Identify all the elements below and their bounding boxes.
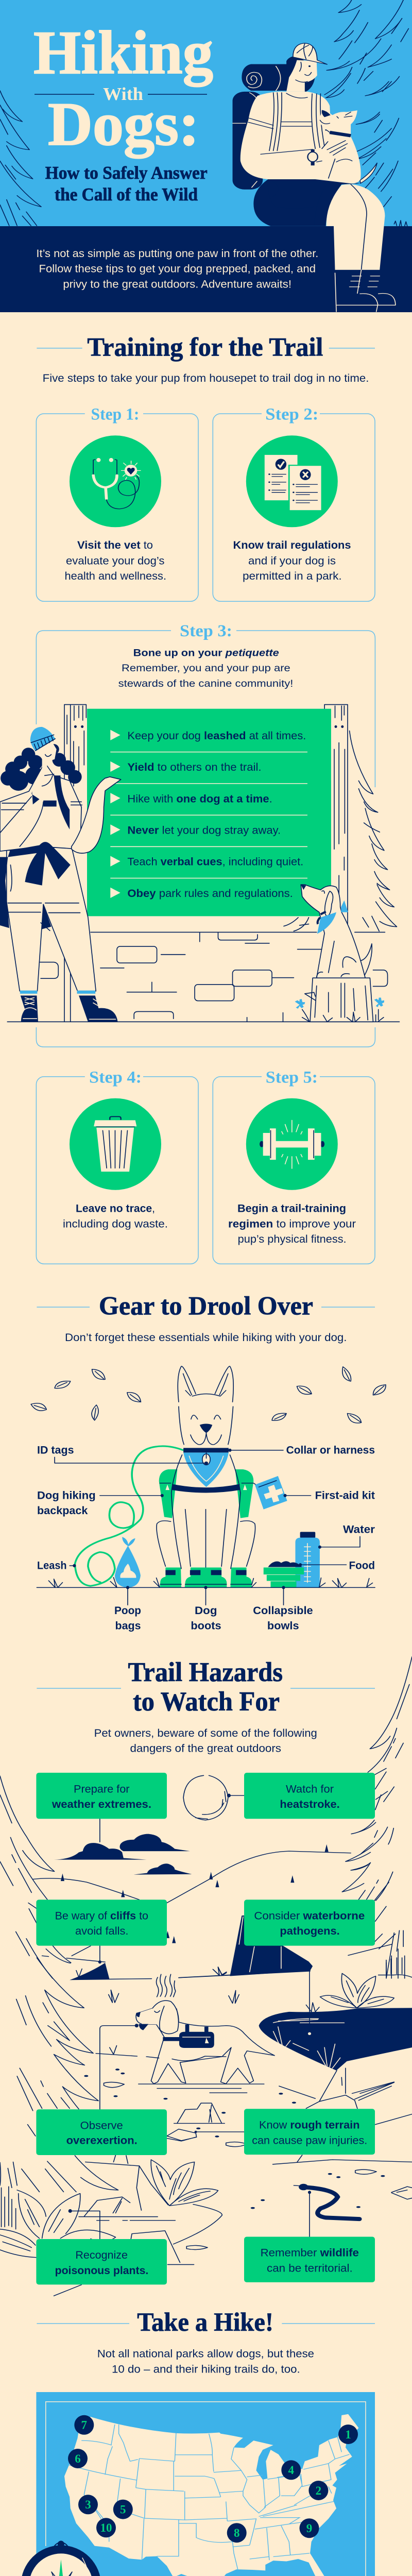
socks [20, 991, 37, 994]
callout: poisonous plants: poisonous plants. [55, 2265, 148, 2277]
illustration: sitting dog on stump [295, 885, 384, 1022]
cliff and rock base [70, 1963, 110, 1980]
shirt and arm details [43, 801, 57, 807]
map pins: 8 [234, 2527, 239, 2539]
sun [183, 1775, 228, 1820]
map pins: 3 [85, 2498, 91, 2511]
steam [157, 1974, 176, 1997]
intro: hazards: dangers of the great outdoors [130, 1743, 281, 1755]
wildlife connector [308, 2192, 311, 2236]
bandana [183, 1452, 229, 1487]
panel: step 3 [0, 622, 400, 1047]
hair [1, 744, 82, 791]
callout: overexertion: Observe [80, 2120, 123, 2132]
ground and grass [37, 1578, 375, 1587]
step 3 intro text: Bone up on your petiquette [133, 648, 279, 659]
stump [310, 978, 373, 1022]
step 1 text: evaluate your dog’s [66, 555, 165, 567]
callout: rough terrain [244, 2109, 375, 2155]
gear labels: backpack [37, 1505, 88, 1517]
callout: waterborne pathogens [244, 1900, 375, 1946]
map pins [68, 2415, 358, 2543]
green sign panel [87, 709, 331, 916]
leg details [351, 184, 367, 270]
step 2 text: Know trail regulations [233, 539, 351, 551]
backpack details [160, 1483, 257, 1485]
gear labels: bags [115, 1620, 141, 1632]
step 1 text [65, 539, 166, 582]
terrain connector [308, 1971, 311, 2033]
id tag [202, 1453, 210, 1465]
clothing lines [248, 44, 329, 224]
panel: step 5 [213, 1068, 375, 1264]
tied jacket [0, 842, 71, 928]
gear labels: Collapsible [253, 1605, 313, 1617]
map pins: 1 [345, 2428, 351, 2441]
callout: weather extremes: Prepare for [74, 1783, 130, 1795]
poop bag [115, 1537, 141, 1587]
gear labels: Dog [195, 1605, 217, 1617]
map panel [21, 2392, 375, 2576]
shorts [253, 178, 360, 226]
rock details [239, 1917, 281, 1972]
illustration: pine trees [0, 0, 408, 226]
boot [335, 270, 396, 312]
title: Hiking [33, 18, 213, 87]
callout: cliffs: Be wary of cliffs to [55, 1910, 148, 1922]
gear labels [37, 1445, 375, 1632]
overheated dog [136, 2001, 274, 2084]
intro text: Follow these tips to get your dog prepped, packed, and [39, 263, 316, 275]
map pins: 2 [316, 2484, 321, 2497]
hills [33, 1851, 351, 1903]
step 2 text: and if your dog is [248, 555, 336, 567]
icon: stethoscope [70, 435, 161, 527]
heading: Trail Hazards to Watch For: to Watch For [133, 1687, 280, 1717]
dog in arms [307, 110, 377, 183]
clouds [54, 1834, 192, 1875]
callout: weather extremes: weather extremes. [52, 1799, 151, 1810]
tail [360, 944, 372, 977]
dog connector and ground [96, 2026, 159, 2110]
gear labels: ID tags [37, 1445, 74, 1456]
right tree [342, 1657, 412, 1978]
intro text: privy to the great outdoors. Adventure awaits! [63, 278, 291, 290]
icon: trash can [70, 1098, 161, 1190]
gear labels: Food [349, 1560, 375, 1572]
title: Dogs: [48, 90, 199, 159]
legs [7, 846, 96, 991]
gear labels: Leash [37, 1560, 67, 1572]
lower scene [0, 1958, 412, 2296]
rolled bedroll [242, 64, 288, 91]
step 5 text [228, 1202, 356, 1245]
sign posts [64, 705, 348, 1022]
map pins: 9 [306, 2522, 312, 2535]
etiquette checklist: Never let your dog stray away. [127, 824, 281, 837]
upper scene [0, 1657, 412, 1978]
intro: gear: Don’t forget these essentials while hiking with your dog. [65, 1332, 347, 1344]
step 4 heading: Step 4: [89, 1068, 142, 1087]
bandana [317, 901, 348, 934]
hazard plant connector [70, 2197, 175, 2240]
step 4 text [63, 1202, 168, 1230]
water bottle [295, 1532, 320, 1587]
illustration: hazards trail scene [0, 1657, 412, 2296]
title [33, 18, 213, 159]
step 3 intro text: Remember, you and your pup are [122, 663, 290, 674]
step 2 text: permitted in a park. [243, 570, 342, 582]
gear labels: Poop [114, 1605, 141, 1617]
callout: wildlife: Remember wildlife [261, 2247, 359, 2259]
floating leaves [31, 1367, 386, 1423]
pine tree [284, 731, 397, 931]
callout: poisonous plants: Recognize [75, 2249, 128, 2261]
callout: poisonous plants [36, 2239, 167, 2284]
cap [293, 43, 327, 64]
torso [0, 762, 81, 851]
callout: waterborne pathogens: Consider waterborne [254, 1910, 365, 1922]
subtitle: the Call of the Wild [55, 184, 198, 205]
step 5 heading: Step 5: [266, 1068, 318, 1087]
rocks and ground details [54, 2068, 412, 2296]
icon: regulations documents [246, 435, 338, 527]
intro text: It’s not as simple as putting one paw in front of the other. [36, 248, 318, 260]
hair [286, 56, 316, 92]
sun connector [229, 1794, 244, 1797]
intro text [36, 248, 318, 290]
heading: Training for the Trail: Training for the Trail [87, 333, 323, 362]
collar [318, 912, 326, 924]
step 3 intro text: stewards of the canine community! [118, 678, 293, 689]
dog boots [160, 1568, 252, 1587]
step 5 text: pup’s physical fitness. [238, 1233, 347, 1245]
gear labels: Water [343, 1524, 375, 1536]
intro: five steps: Five steps to take your pup from housepet to trail dog in no time. [43, 372, 369, 384]
boot details [23, 997, 115, 1019]
map pins: 6 [75, 2452, 81, 2465]
step 4 text: including dog waste. [63, 1218, 168, 1230]
panel: hero header [0, 0, 412, 312]
snake [302, 2187, 359, 2219]
intro: hazards [94, 1727, 317, 1755]
step 1 text: Visit the vet to [77, 539, 153, 551]
grass [109, 1967, 239, 2054]
poisonous plants [0, 2160, 218, 2258]
face [42, 743, 57, 778]
etiquette checklist: Keep your dog leashed at all times. [127, 730, 306, 742]
callout lines [55, 1449, 360, 1605]
callout: wildlife: can be territorial. [267, 2262, 353, 2274]
stump details [305, 983, 368, 1020]
panel: step 4 [36, 1068, 198, 1264]
subtitle [45, 163, 208, 205]
step 2 text [233, 539, 351, 582]
hat details [31, 735, 55, 756]
sky background [0, 0, 412, 226]
map pins: 7 [81, 2418, 87, 2432]
subtitle: How to Safely Answer [45, 163, 208, 183]
boots [21, 995, 118, 1022]
step 5 text: Begin a trail-training [237, 1202, 346, 1214]
rock formation [230, 1914, 313, 1976]
dog details [317, 891, 356, 977]
etiquette checklist: Hike with one dog at a time . [127, 793, 272, 805]
callout: waterborne pathogens: pathogens. [280, 1925, 340, 1937]
backpack [233, 92, 263, 190]
weather connector [99, 1819, 100, 1842]
lake [259, 2008, 412, 2071]
intro: hazards: Pet owners, beware of some of the following [94, 1727, 317, 1739]
panel: step 2 [213, 405, 375, 601]
intro: national parks: Not all national parks allow dogs, but these [97, 2348, 314, 2360]
bandana details [189, 1456, 224, 1481]
navy ground band [0, 226, 412, 312]
leash [75, 1446, 183, 1586]
intro: national parks [97, 2348, 314, 2375]
left forest [0, 1958, 139, 2192]
intro: national parks: 10 do – and their hiking trails do, too. [112, 2363, 300, 2375]
neck and face [286, 60, 317, 92]
illustration: woman hiker [0, 727, 121, 1022]
dog body [301, 885, 365, 978]
illustration: hiker with dog [233, 43, 396, 312]
torso and arm [241, 92, 332, 179]
bricks and ground [7, 932, 400, 1022]
map pins: 5 [120, 2503, 126, 2516]
harness band [172, 1484, 239, 1493]
etiquette checklist: Obey park rules and regulations. [127, 888, 293, 900]
title: With [103, 84, 143, 104]
callout: weather extremes [36, 1773, 167, 1819]
etiquette checklist: Yield to others on the trail. [127, 761, 262, 773]
hat [30, 727, 55, 751]
green backpack [159, 1469, 253, 1518]
step 2 heading: Step 2: [265, 405, 318, 423]
first-aid kit [255, 1476, 287, 1510]
panel: step 1 [36, 405, 198, 601]
collapsible bowl with food [264, 1561, 304, 1587]
stones [84, 2069, 385, 2209]
heading: Trail Hazards to Watch For [37, 1657, 375, 1717]
map pins: 10 [100, 2521, 112, 2534]
heading: Gear to Drool Over: Gear to Drool Over [99, 1292, 313, 1321]
callout: heatstroke [244, 1773, 375, 1819]
boot details [335, 270, 396, 312]
callout: overexertion [36, 2109, 167, 2155]
step 1 text: health and wellness. [65, 570, 166, 582]
backpack strap [54, 775, 70, 829]
gear labels: Collar or harness [286, 1445, 375, 1456]
icon: dumbbell [246, 1098, 338, 1190]
callout: cliffs [36, 1900, 167, 1946]
dog outline [157, 1366, 255, 1587]
left tree [0, 1776, 71, 1978]
callout: wildlife [244, 2237, 375, 2282]
step 1 heading: Step 1: [91, 405, 139, 423]
callout: heatstroke: heatstroke. [280, 1799, 340, 1810]
callout: overexertion: overexertion. [66, 2135, 138, 2147]
dog nose [301, 885, 306, 890]
callout: cliffs: avoid falls. [75, 1925, 129, 1937]
etiquette checklist [110, 730, 307, 900]
leafy plant by lake [306, 1958, 412, 2012]
US map [64, 2414, 358, 2576]
pants details [8, 865, 80, 930]
gear labels: First-aid kit [315, 1490, 375, 1502]
etiquette checklist: Teach verbal cues, including quiet. [127, 856, 303, 868]
gear labels: bowls [267, 1620, 299, 1632]
small pines [61, 1844, 329, 1943]
step 5 text: regimen to improve your [228, 1218, 356, 1230]
callout: rough terrain: can cause paw injuries. [252, 2135, 367, 2147]
icon: compass [21, 2541, 101, 2576]
step 3 intro text [118, 648, 293, 689]
illustration: dog with gear diagram [31, 1366, 386, 1632]
flowers and grass [295, 997, 384, 1022]
gear labels: Dog hiking [37, 1490, 96, 1502]
collar [183, 1448, 229, 1452]
illustration: scene behind sign [7, 705, 400, 1022]
heading: Take a Hike: Take a Hike! [137, 2308, 273, 2337]
map pins: 4 [288, 2464, 295, 2477]
raised arm [72, 777, 121, 853]
step 4 text: Leave no trace, [76, 1202, 155, 1214]
heading: Trail Hazards to Watch For: Trail Hazards [128, 1657, 283, 1687]
step 3 heading: Step 3: [180, 622, 232, 640]
lake details [273, 2019, 344, 2068]
callout: heatstroke: Watch for [286, 1783, 334, 1795]
leg [327, 184, 385, 270]
callout: rough terrain: Know rough terrain [259, 2120, 359, 2131]
cliff [66, 1946, 105, 1962]
dog nose [200, 1424, 212, 1433]
gear labels: boots [191, 1620, 221, 1632]
